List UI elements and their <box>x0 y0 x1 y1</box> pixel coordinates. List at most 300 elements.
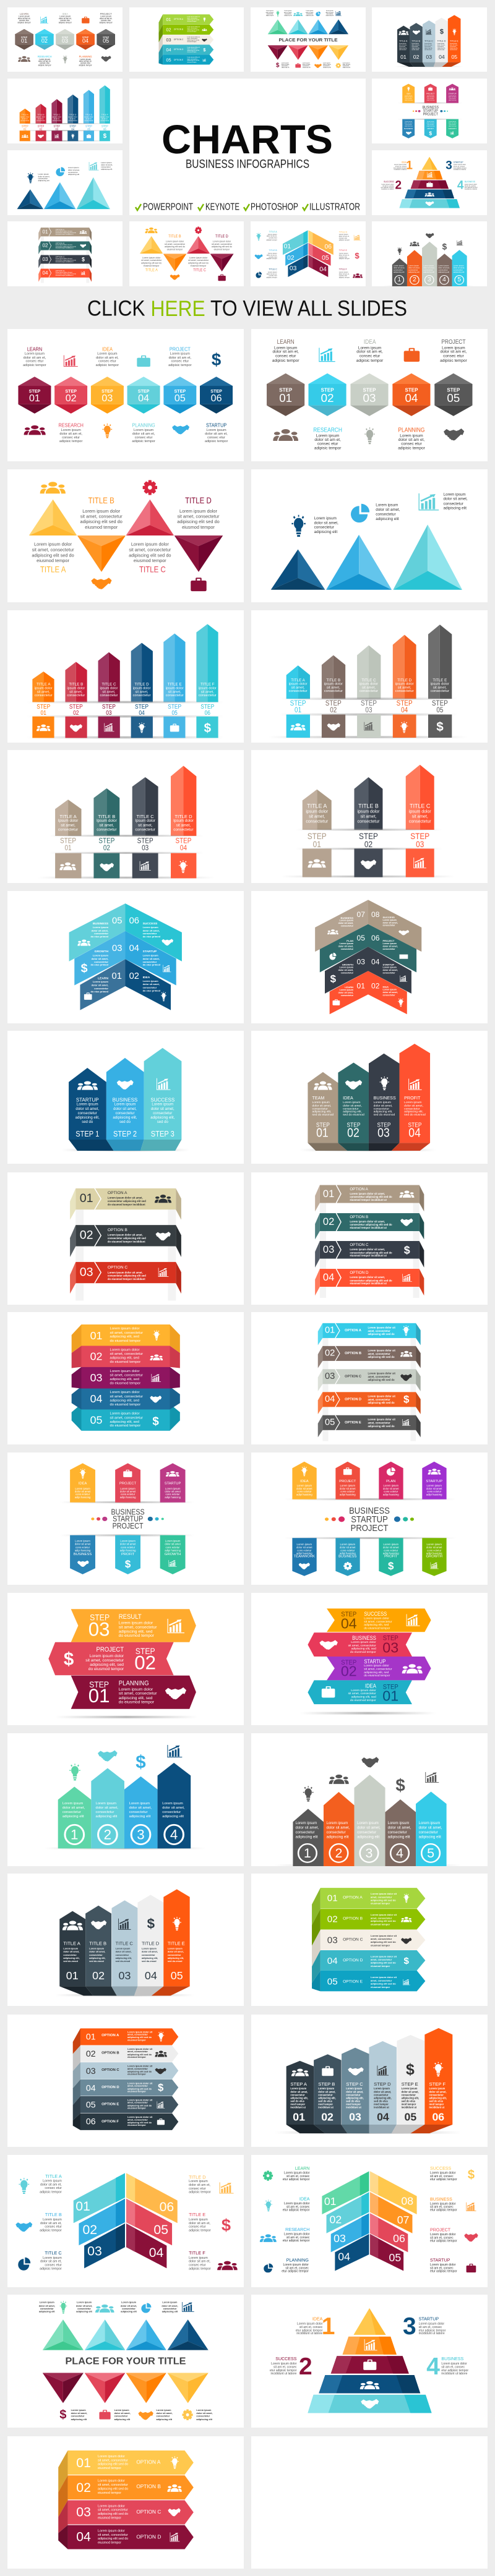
arrows stack <box>73 2028 178 2130</box>
body text: Lorem ipsum dolor sit <box>127 2031 153 2033</box>
titles: TITLE C <box>139 565 166 574</box>
body text blocks: adipisic tempor <box>132 440 155 443</box>
slide G2: four ribbons <box>251 1172 488 1305</box>
right text blocks: STARTUP <box>430 2258 450 2263</box>
thumbnail: tags <box>372 79 487 143</box>
slide E2: four chevron layers <box>251 891 488 1023</box>
text blocks: adipiscing elit, <box>290 2096 308 2099</box>
left text blocks: consec etur <box>45 2225 62 2229</box>
arrows <box>58 1763 191 1848</box>
top tags: adipi hasicing <box>75 1496 91 1499</box>
ribbon 03 <box>70 1262 181 1294</box>
text blocks: TITLE C <box>116 1940 133 1946</box>
top tags: cons ectetur <box>427 1490 442 1493</box>
text blocks: dolor sit amet, <box>429 2090 447 2093</box>
hexagons row: STEP <box>279 387 293 393</box>
text blocks: dolor sit amet, <box>346 2090 363 2093</box>
arrow text: TITLE C <box>137 814 154 819</box>
arrow text: sit amet, <box>360 814 377 819</box>
body text blocks: consec etur <box>135 436 153 440</box>
band 03: STEP <box>383 1635 398 1642</box>
arrow text: ipsum dolor <box>324 682 343 686</box>
text blocks: incididunt ut labore <box>296 2332 323 2335</box>
top tags: cons ectetur <box>297 1490 312 1493</box>
text blocks: Lorem ipsum <box>63 1947 79 1950</box>
ribbon 01 <box>318 1323 421 1346</box>
bottom tags: adipi hasicing <box>75 1548 91 1551</box>
lower text: consectetur <box>114 2415 128 2418</box>
text blocks: Lorem ipsum <box>340 989 353 991</box>
body text blocks: consec etur <box>62 436 80 440</box>
text blocks: adipiscing elit, sed <box>110 1335 139 1339</box>
slide M1: six horizontal arrows <box>7 2015 244 2147</box>
bottom tags: BUSINESS <box>74 1553 92 1556</box>
left text blocks: RESEARCH <box>285 2227 309 2232</box>
arrow 04: Lorem ipsum dolor <box>98 2530 125 2533</box>
body text: eiusmod tempor <box>127 2124 146 2126</box>
text blocks: adipiscing elit, sed <box>110 1356 139 1360</box>
step numbers <box>316 1122 422 1140</box>
slide A1: six hexagon steps <box>7 329 244 461</box>
body text blocks: dolor sit amet, <box>314 521 338 525</box>
body text blocks: consec etur <box>359 354 381 358</box>
hexagons row <box>18 377 233 414</box>
arrow text: sit amet, <box>37 690 50 694</box>
text blocks: Lorem ipsum <box>340 966 353 968</box>
text blocks: dolor sit amet, <box>338 922 353 924</box>
arrow 01: adipiscing elit sed do <box>98 2463 128 2467</box>
text blocks: do eiusmod tempor <box>110 1339 140 1343</box>
top tags: Lorem ipsum <box>384 1484 398 1487</box>
text blocks: sed do elus <box>374 2099 388 2102</box>
band 01: IDEA <box>365 1683 376 1689</box>
text blocks: consectetur <box>429 2093 444 2096</box>
ribbon 03: consectetur adipiscing elit sed do <box>350 1251 392 1254</box>
step labels: STEP <box>397 699 413 707</box>
text blocks: adipiscing elit, <box>346 2096 364 2099</box>
text blocks: adipiscing elit, <box>116 1957 132 1960</box>
labels <box>277 339 466 433</box>
ribbon 02: do eiusmod tempor incididunt <box>108 1240 145 1243</box>
ribbon 01: do eiusmod tempor incididunt <box>108 1203 145 1206</box>
slide L2: five horizontal arrows <box>251 1874 488 2006</box>
arrow text: sit amet, <box>138 823 153 827</box>
body text: amet, consectetur <box>127 2033 148 2036</box>
arrow text: ipsum dolor <box>395 682 414 686</box>
text blocks: adipiscing elit, <box>142 1957 158 1960</box>
arrows <box>286 625 452 699</box>
arrow text: sit amet, <box>362 686 376 689</box>
lower blocks and icons <box>38 835 215 879</box>
icons: $ <box>136 1752 146 1773</box>
text blocks: consectetur <box>290 2093 305 2096</box>
upper text: consectetur <box>40 2308 54 2310</box>
band 02: do eiusmod tempor <box>364 1674 390 1678</box>
arrow text: adipiscing elit <box>129 1815 151 1819</box>
arrow 04: Lorem ipsum dolor sit <box>371 1955 397 1958</box>
text blocks: Lorem ipsum <box>404 1101 422 1104</box>
arrow text: TITLE A <box>291 678 306 683</box>
right text blocks: etur adipisic tempor <box>430 2270 457 2274</box>
step labels: 01 <box>65 844 72 852</box>
labels: PROJECT <box>441 339 466 345</box>
lower text: dolor sit amet, <box>196 2412 213 2415</box>
numbers: 04 <box>86 2083 96 2092</box>
icons <box>59 2301 194 2421</box>
arrow 04: 04 <box>327 1956 338 1966</box>
body text blocks: Lorem ipsum <box>97 352 118 356</box>
pyramid icons <box>360 2339 379 2408</box>
text blocks: STARTUP <box>419 2317 439 2322</box>
text blocks: sed do elus <box>318 2099 333 2102</box>
step labels: 04 <box>180 844 187 852</box>
arrow text: consectetur <box>295 1831 315 1835</box>
option labels: OPTION A <box>101 2034 119 2037</box>
body text blocks: adipiscing elit <box>314 529 337 534</box>
arrow text <box>62 1802 185 1819</box>
numbers: 02 <box>86 2049 96 2058</box>
hexagons row: STEP <box>363 387 376 393</box>
text blocks: Lorem ipsum <box>382 942 397 945</box>
band 01: 01 <box>382 1688 398 1704</box>
arrow 04: adipiscing elit sed do <box>371 1961 396 1964</box>
text blocks: STARTUP <box>382 963 394 966</box>
text blocks <box>91 922 161 992</box>
top tags: cons ectetur <box>75 1492 90 1495</box>
left text blocks: adipisic tempor <box>40 2229 62 2233</box>
slide E1: three chevron layers <box>7 891 244 1023</box>
top tags <box>70 1463 186 1503</box>
ribbon 03: OPTION C <box>108 1266 127 1270</box>
body text: amet, consectetur <box>127 2102 148 2104</box>
arrow text: dolor sit amet, <box>357 1827 381 1830</box>
icons <box>155 2031 167 2125</box>
left text blocks: adipisic tempor <box>40 2191 62 2194</box>
bottom tags <box>292 1538 447 1576</box>
text blocks: Lorem ipsum <box>143 925 158 928</box>
band 03 <box>71 1609 196 1642</box>
step labels: STEP <box>290 699 306 707</box>
arrow text: consectetur <box>289 689 308 693</box>
arrow text: consectetur <box>162 1810 181 1814</box>
text blocks: STARTUP <box>76 1097 99 1102</box>
body text blocks: Lorem ipsum <box>444 492 466 497</box>
numbers: 04 <box>338 2250 350 2263</box>
top tags: STARTUP <box>165 1482 181 1485</box>
text blocks <box>75 1097 175 1124</box>
ribbon 01: Lorem ipsum dolor sit amet, <box>108 1196 143 1199</box>
text blocks: mod tempor <box>429 2102 444 2105</box>
right text blocks: BUSINESS <box>430 2197 452 2201</box>
body text blocks: consectetur <box>314 525 334 529</box>
band 02: adipiscing elit, sed <box>364 1670 389 1674</box>
arrow text: consectetur <box>173 827 194 832</box>
text blocks: dolor sit amet, <box>151 1107 174 1111</box>
labels: PLANNING <box>398 427 424 433</box>
step labels: STEP 3 <box>151 1129 174 1138</box>
text blocks: GROWTH <box>95 950 108 953</box>
top tags: PLAN <box>386 1480 395 1483</box>
numbers: 04 <box>145 1969 157 1982</box>
ribbon 02 <box>315 1213 424 1239</box>
body text: adipiscing elit sed do <box>127 2122 152 2124</box>
arrow text: TITLE C <box>410 803 431 809</box>
text blocks: Lorem ipsum <box>346 2087 362 2090</box>
text blocks: dolor sit amet, <box>374 2090 391 2093</box>
top labels <box>27 346 226 429</box>
arrow text: Ipsum dolor <box>135 819 155 823</box>
body text blocks: consectetur <box>444 501 463 506</box>
step labels: STEP <box>175 837 191 845</box>
body text blocks: consec etur <box>275 354 296 358</box>
text blocks: consectetur <box>78 1112 97 1115</box>
center title: STARTUP <box>113 1515 143 1524</box>
arrow text: dolor sit amet, <box>327 1827 350 1830</box>
text blocks: adipiscing elit, <box>89 1957 106 1960</box>
numbers: 02 <box>90 1350 103 1362</box>
ribbon 01: adipiscing elit sed do <box>368 1333 395 1336</box>
icons <box>327 929 409 1007</box>
text blocks: Lorem ipsum <box>142 1947 157 1950</box>
right text blocks: adipisic tempor <box>189 2267 211 2271</box>
numbered circles: 5 <box>427 1846 434 1861</box>
chevron bands <box>322 2172 417 2271</box>
text blocks: Lorem ipsum <box>402 2087 418 2090</box>
right text blocks: TITLE E <box>189 2212 205 2217</box>
bottom tags: adipi hasicing <box>165 1548 181 1551</box>
ribbon 02: OPTION B <box>345 1352 361 1355</box>
body text blocks: adipisic tempor <box>205 440 228 443</box>
text blocks: dolor sit amet, <box>142 1951 158 1953</box>
step labels: STEP <box>102 703 116 710</box>
step numbers: 02 <box>347 1126 359 1140</box>
band 01: STEP <box>89 1679 109 1689</box>
left text blocks: dolor sit am et, <box>40 2222 62 2225</box>
text blocks: mod tempor <box>346 2102 361 2105</box>
lower text: consectetur <box>157 2415 170 2418</box>
text blocks: adipisicing elit, <box>75 1116 100 1120</box>
upper text: Lorem ipsum <box>162 2301 178 2303</box>
right text blocks: Lorem ipsum dolor <box>430 2263 456 2267</box>
step labels: STEP <box>98 837 114 845</box>
arrow text: ipsum dolor <box>133 687 151 691</box>
arrow 03: adipiscing elit sed do <box>98 2512 128 2516</box>
arrow text: dolor sit amet, <box>388 1827 411 1830</box>
bottom tags: adipi hasicing <box>383 1551 399 1555</box>
band 02: adipiscing elit, sed <box>90 1662 124 1666</box>
ribbon 05: adipiscing elit sed do <box>368 1425 395 1428</box>
slide B2: three mountains <box>251 469 488 602</box>
text blocks: adipiscing elit, <box>374 2096 392 2099</box>
numbers: 03 <box>90 1371 103 1384</box>
text blocks <box>290 2081 447 2109</box>
ribbon 04: OPTION D <box>345 1397 361 1401</box>
hexagons row: STEP <box>210 389 222 394</box>
lower blocks and icons <box>269 697 467 738</box>
ribbon 03: 03 <box>80 1265 93 1279</box>
body text blocks <box>23 352 228 443</box>
text blocks: consectetur <box>341 994 354 997</box>
option labels: OPTION F <box>101 2120 119 2123</box>
text blocks: consectetur <box>374 1107 389 1111</box>
arrow text: consectetur <box>129 1810 148 1814</box>
icons <box>15 2178 238 2271</box>
top tags: Lorem ipsum <box>120 1486 136 1490</box>
top tags: Lorem ipsum <box>75 1486 90 1490</box>
left text blocks <box>282 2166 310 2274</box>
numbers: 05 <box>389 2251 401 2264</box>
step labels: STEP <box>137 837 153 845</box>
arrow 05: OPTION E <box>343 1979 363 1984</box>
text blocks: consectetur <box>94 986 108 989</box>
option labels: OPTION C <box>101 2068 119 2072</box>
ribbon 03: 03 <box>323 1244 334 1255</box>
step labels: STEP <box>69 703 83 710</box>
body text: eiusmod tempor <box>127 2107 146 2110</box>
ribbon 05 <box>318 1415 421 1437</box>
numbers: 05 <box>405 2111 416 2123</box>
large numerals: 3 <box>403 2313 416 2340</box>
text blocks: consectetur <box>94 960 108 963</box>
option labels: OPTION B <box>101 2051 119 2055</box>
icons <box>62 1916 181 1932</box>
numbers: 02 <box>321 2111 334 2123</box>
upper triangles <box>43 2319 209 2350</box>
arrow text: TITLE F <box>200 682 215 686</box>
thumbnail: four triangles <box>129 221 244 286</box>
arrow text: TITLE B <box>98 814 115 819</box>
left text blocks: etur adipisic tempor <box>283 2239 310 2243</box>
body text blocks: Lorem ipsum dolor <box>34 541 72 547</box>
arrow 03: eiusmod tempor <box>371 1943 390 1947</box>
arrow text: consectetur <box>419 1831 438 1835</box>
body text blocks: sit amet, consectetur <box>129 547 171 552</box>
body text blocks: adipiscing elit sed do <box>32 552 74 558</box>
numbered circles <box>65 1825 183 1845</box>
icons <box>150 1330 163 1428</box>
slide H2: five small ribbons <box>251 1312 488 1444</box>
ribbon 03: Lorem ipsum dolor sit amet, <box>108 1271 143 1274</box>
lower text: adipiscing elit <box>114 2418 131 2421</box>
titles: TITLE A <box>40 565 66 574</box>
text blocks: Lorem ipsum <box>343 1101 360 1104</box>
option labels: OPTION D <box>101 2086 119 2089</box>
top tags: dolor sit amet <box>296 1486 312 1490</box>
labels: RESEARCH <box>313 427 342 433</box>
ribbon 01 <box>70 1188 181 1220</box>
text blocks: dolor sit amet, <box>312 1104 331 1107</box>
text blocks: dolor sit amet, <box>402 2090 419 2093</box>
top tags: Lorem ipsum <box>297 1484 312 1487</box>
upper text <box>39 2301 178 2313</box>
text blocks: do eiusmod tempor <box>110 1424 140 1428</box>
icons: $ <box>406 2062 415 2078</box>
body text blocks: dolor sit am et, <box>398 437 424 441</box>
pole shadows <box>75 1209 176 1300</box>
body text blocks: eiusmod tempor <box>37 558 70 563</box>
body text blocks: consec etur <box>171 360 189 364</box>
title: CHARTS <box>161 116 333 162</box>
upper text: Lorem ipsum <box>121 2301 137 2303</box>
arrow text: Lorem ipsum <box>95 1802 116 1806</box>
text blocks: dolor sit amet, <box>75 1107 99 1111</box>
top tags: Lorem ipsum <box>340 1484 356 1487</box>
slide K1: four numbered arrows <box>7 1733 244 1866</box>
software list: POWERPOINT <box>143 202 193 213</box>
arrow 01: OPTION A <box>136 2459 161 2465</box>
right text blocks: sit am et, consec <box>430 2205 454 2209</box>
top labels: STARTUP <box>206 422 226 429</box>
body text: adipiscing elit sed do <box>127 2071 152 2073</box>
ribbon 01: eiusmod tempor incididunt ut <box>350 1198 387 1201</box>
text blocks: LEARN <box>98 976 108 980</box>
icons <box>77 1078 171 1090</box>
arrow text: ipsum dolor <box>358 809 380 814</box>
numbers: 02 <box>371 981 380 990</box>
top tags: dolor sit amet <box>120 1490 136 1493</box>
step labels: STEP <box>200 703 214 710</box>
left text blocks: Lorem ipsum dolor <box>284 2171 310 2175</box>
body text: Lorem ipsum dolor sit <box>127 2099 153 2102</box>
band 04: Lorem ipsum dolor <box>364 1616 389 1620</box>
numbers: 06 <box>371 934 380 942</box>
text blocks: consectetur <box>402 2093 416 2096</box>
body text: amet, consectetur <box>127 2118 148 2121</box>
left text blocks: etur adipisic tempor <box>283 2178 310 2181</box>
text blocks: IDEA <box>343 1096 353 1101</box>
right text blocks: Lorem ipsum <box>189 2256 208 2260</box>
text blocks: consectetur <box>63 1954 77 1956</box>
arrow text: Lorem ipsum <box>129 1802 150 1806</box>
hexagons row: 06 <box>211 393 222 404</box>
chevron bands <box>74 2173 178 2268</box>
text blocks: Lorem ipsum <box>290 2087 306 2090</box>
arrow text: consectetur <box>395 689 414 693</box>
text blocks: etur adipisic tempor <box>419 2329 446 2332</box>
text blocks: dolor sit amet, <box>168 1951 184 1953</box>
ribbon 04: 04 <box>323 1272 334 1283</box>
band 02: PROJECT <box>97 1646 124 1653</box>
right text blocks: consec etur <box>189 2225 206 2229</box>
text blocks: dolor sit amet, <box>374 1104 392 1107</box>
numbers: 08 <box>371 910 380 919</box>
body text blocks: Lorem ipsum <box>206 429 226 432</box>
ribbon 02 <box>70 1225 181 1257</box>
band 04: 04 <box>341 1616 357 1631</box>
top tags: adipi hasicing <box>120 1496 136 1499</box>
step labels <box>308 830 429 849</box>
top tags: cons ectetur <box>121 1492 136 1495</box>
top tags: Lorem ipsum <box>426 1484 442 1487</box>
triangles <box>29 500 223 572</box>
numbers: 07 <box>397 2214 409 2226</box>
text blocks: adipiscing elit, <box>402 2096 419 2099</box>
upper text: adipiscing elit <box>121 2311 137 2313</box>
lower text: Lorem ipsum <box>71 2409 86 2412</box>
arrow 02: OPTION B <box>136 2484 161 2489</box>
arrow 02: sit amet, consectetur <box>98 2483 128 2487</box>
numbered circles <box>298 1844 440 1862</box>
lower blocks and icons: $ <box>204 721 212 735</box>
bottom tags: dolor sit amet <box>75 1542 91 1545</box>
top tags: adipi hasicing <box>383 1493 399 1496</box>
text blocks <box>338 915 398 997</box>
left text blocks: Lorem ipsum <box>43 2179 62 2183</box>
chevrons <box>315 900 421 1014</box>
text blocks: Lorem ipsum <box>143 979 158 982</box>
band 03 <box>308 1632 412 1657</box>
numbers: 07 <box>357 910 365 919</box>
